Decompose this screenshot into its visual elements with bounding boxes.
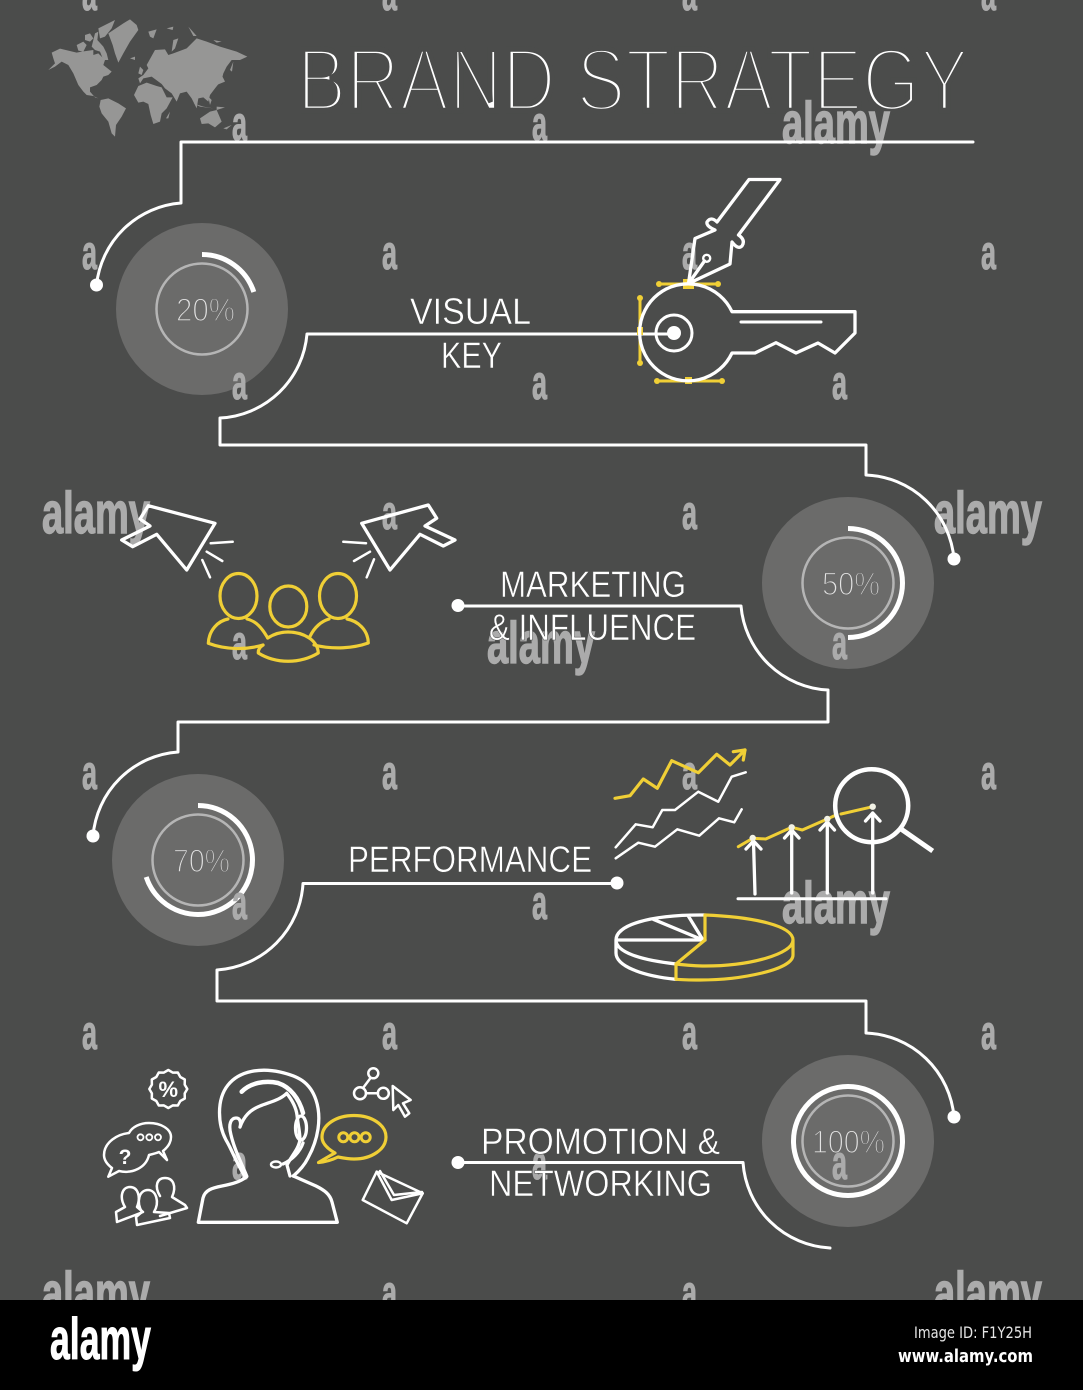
label: promotion and networking: NETWORKING bbox=[489, 1163, 712, 1204]
watermark: alamy repeated: a bbox=[382, 1267, 397, 1320]
icon: chat bubbles bbox=[104, 1123, 171, 1177]
watermark: alamy repeated: a bbox=[682, 747, 697, 800]
label: marketing and influence bbox=[489, 564, 696, 648]
icon: percent badge bbox=[149, 1070, 187, 1108]
footer image id: Image ID: F1Y25H bbox=[914, 1323, 1032, 1342]
watermark: alamy repeated: a bbox=[532, 357, 547, 410]
icon: rising line charts bbox=[615, 750, 746, 858]
watermark: alamy repeated: a bbox=[82, 227, 97, 280]
icon: audience of three people bbox=[208, 574, 368, 661]
panel: 20% progress dial bbox=[116, 223, 288, 395]
label: marketing and influence: MARKETING bbox=[500, 564, 686, 605]
watermark: alamy repeated: a bbox=[232, 877, 247, 930]
watermark: alamy repeated: a bbox=[232, 357, 247, 410]
footer url: www.alamy.com bbox=[898, 1346, 1033, 1367]
panel: 50% progress dial: 50% bbox=[822, 566, 880, 602]
footer logo: alamy bbox=[50, 1307, 151, 1372]
connector line: visual key to 50% dial bbox=[220, 334, 960, 566]
watermark: alamy repeated: a bbox=[382, 227, 397, 280]
pen nib bbox=[688, 180, 780, 284]
watermark: alamy repeated: a bbox=[532, 877, 547, 930]
label: promotion and networking: PROMOTION & bbox=[481, 1121, 720, 1162]
connector line: promotion end bbox=[452, 1156, 830, 1248]
panel: 70% progress dial bbox=[112, 774, 284, 946]
icon: 3D pie chart bbox=[616, 915, 793, 980]
icon: right megaphone cursor bbox=[343, 505, 455, 577]
panel: 100% progress dial: 100% bbox=[812, 1124, 885, 1160]
watermark: alamy repeated: a bbox=[382, 487, 397, 540]
panel: 100% progress dial bbox=[762, 1055, 934, 1227]
watermark: alamy repeated: a bbox=[82, 1007, 97, 1060]
watermark: alamy repeated: a bbox=[832, 357, 847, 410]
key ring bbox=[656, 315, 692, 351]
watermark: alamy repeated: a bbox=[532, 98, 547, 151]
label: visual key: VISUAL bbox=[410, 291, 531, 332]
icon: call centre agent with headset bbox=[198, 1070, 337, 1222]
watermark: alamy repeated: alamy bbox=[782, 91, 890, 156]
watermark: alamy repeated: alamy bbox=[42, 1261, 150, 1326]
label: marketing and influence: & INFLUENCE bbox=[489, 607, 696, 648]
watermark: alamy repeated: a bbox=[232, 1137, 247, 1190]
label: performance: PERFORMANCE bbox=[348, 839, 592, 880]
key groove bbox=[741, 320, 821, 324]
watermark: alamy repeated: alamy bbox=[782, 871, 890, 936]
watermark: alamy repeated: a bbox=[981, 747, 996, 800]
icon: share network bbox=[354, 1068, 389, 1099]
watermark: alamy repeated: a bbox=[682, 1007, 697, 1060]
watermark: alamy repeated: alamy bbox=[487, 611, 595, 676]
watermark: alamy repeated: a bbox=[981, 1007, 996, 1060]
watermark: alamy repeated: alamy bbox=[42, 481, 150, 546]
watermark: alamy repeated: a bbox=[232, 98, 247, 151]
watermark: alamy repeated: a bbox=[232, 617, 247, 670]
watermark: alamy repeated: a bbox=[682, 1267, 697, 1320]
panel: 70% progress dial: 70% bbox=[173, 843, 230, 879]
panel: 20% progress dial: 20% bbox=[176, 292, 235, 328]
watermark: alamy repeated: a bbox=[382, 747, 397, 800]
icon: yellow speech bubble bbox=[318, 1116, 386, 1162]
icon: chat bubbles: ? bbox=[119, 1146, 131, 1169]
watermark: alamy repeated: a bbox=[682, 487, 697, 540]
panel: 50% progress dial bbox=[762, 497, 934, 669]
label: promotion and networking bbox=[481, 1121, 720, 1204]
icon: bar arrows with magnifier bbox=[738, 769, 933, 899]
footer bar bbox=[0, 1300, 1083, 1390]
label: visual key bbox=[410, 291, 531, 376]
key outline bbox=[640, 284, 855, 381]
watermark: alamy repeated: a bbox=[532, 1137, 547, 1190]
label: visual key: KEY bbox=[441, 335, 502, 376]
title: BRAND STRATEGY bbox=[297, 30, 969, 130]
watermark: alamy repeated: a bbox=[382, 1007, 397, 1060]
connector line: performance to 100% dial bbox=[217, 876, 960, 1124]
icon: mouse cursor bbox=[393, 1086, 411, 1117]
watermark: alamy repeated: a bbox=[832, 617, 847, 670]
icon: left megaphone cursor bbox=[122, 506, 233, 577]
icon: percent badge: % bbox=[159, 1077, 178, 1102]
watermark: alamy repeated: a bbox=[82, 747, 97, 800]
watermark: alamy repeated: a bbox=[682, 227, 697, 280]
icon: world map bbox=[48, 19, 247, 137]
icon: small group of people bbox=[116, 1178, 187, 1225]
yellow bezier handles bbox=[637, 279, 725, 384]
watermark: alamy repeated: a bbox=[832, 1137, 847, 1190]
watermark: alamy repeated: a bbox=[981, 227, 996, 280]
icon: envelope bbox=[363, 1171, 423, 1223]
connector line: marketing to 70% dial bbox=[86, 599, 828, 842]
connector line: title to 20% dial bbox=[90, 142, 973, 292]
icon: key with pen nib bbox=[637, 180, 855, 384]
